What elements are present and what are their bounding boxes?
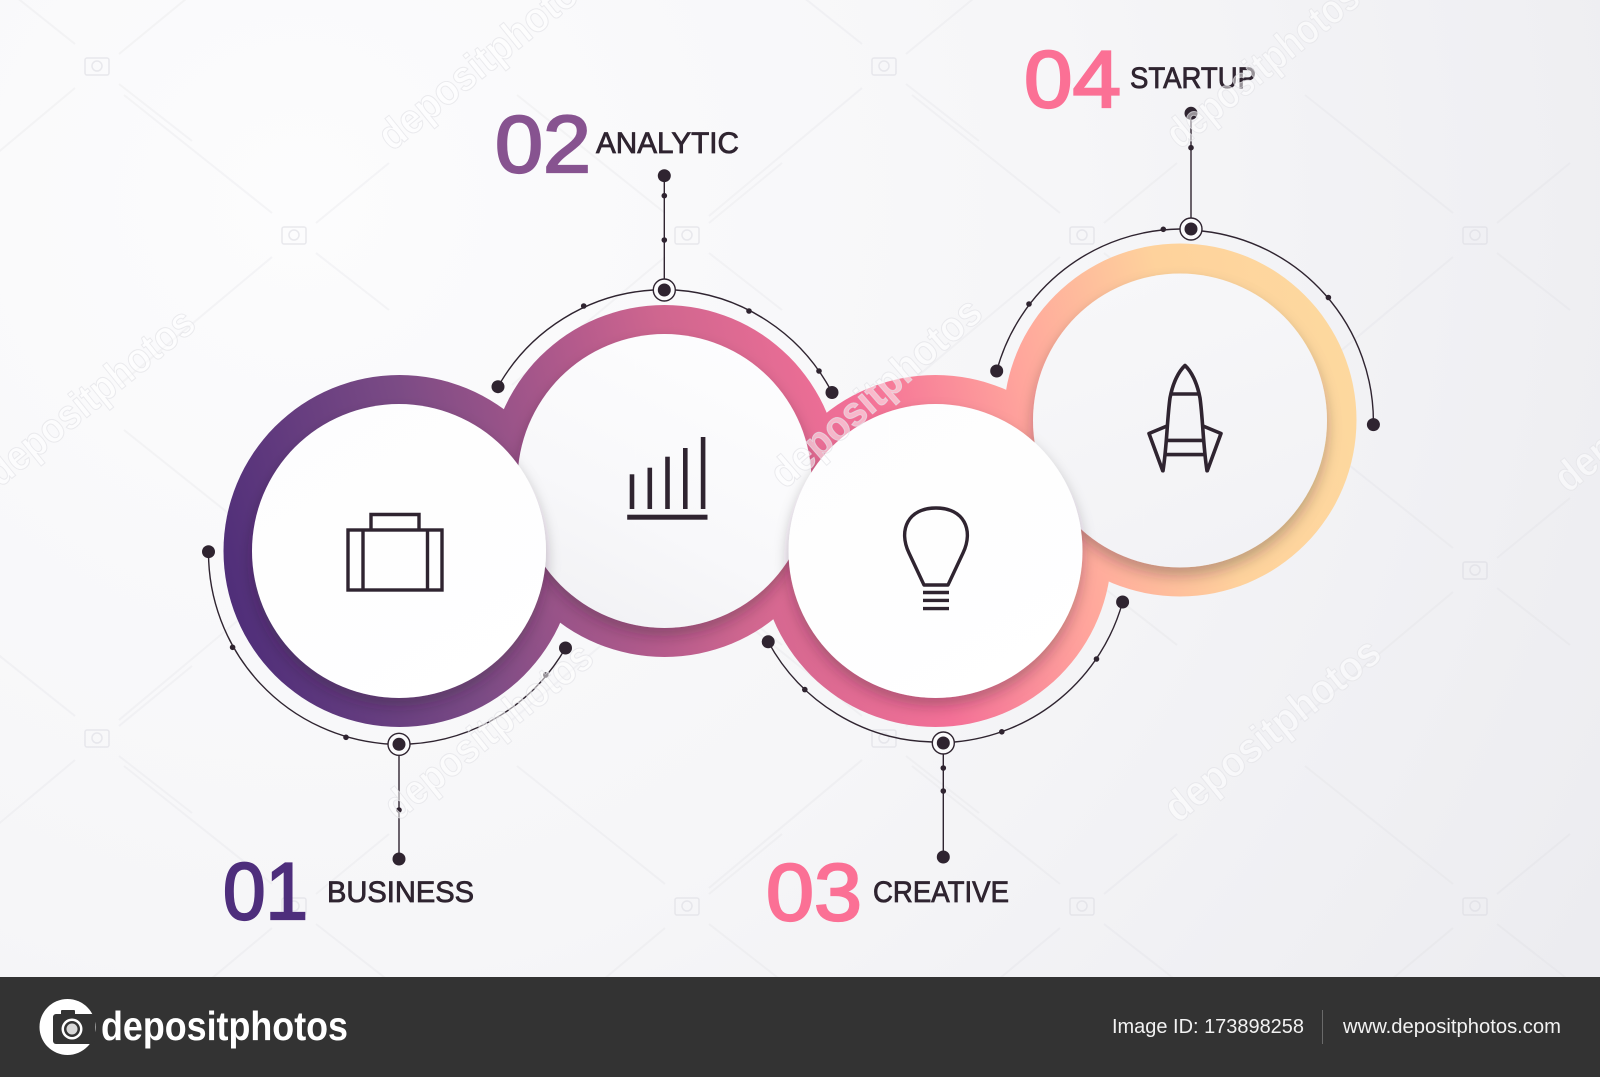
watermark text: depositphotos: [1154, 628, 1390, 831]
label: 01 business: BUSINESS: [327, 876, 474, 909]
connector: business: [202, 545, 572, 866]
connector: creative: [762, 596, 1129, 864]
disc: startup: [1033, 274, 1327, 568]
label: 02 analytic: 02: [495, 100, 591, 190]
watermark text: depositphotos: [374, 632, 602, 829]
icon: briefcase: [348, 514, 442, 590]
connector: analytic: [492, 169, 838, 399]
footer url: www.depositphotos.com: [1342, 1016, 1561, 1038]
disc: analytic: [518, 334, 812, 628]
label: 03 creative: 03: [766, 848, 862, 938]
label: 02 analytic: ANALYTIC: [596, 127, 739, 160]
watermark text: [0, 0, 1600, 831]
footer divider: [1322, 1010, 1323, 1044]
footer logo icon: [40, 999, 96, 1055]
icon: light bulb: [905, 508, 967, 609]
icon: rocket: [1149, 366, 1221, 471]
label: 04 startup: 04: [1024, 35, 1121, 125]
gradient band behind the four discs: [224, 244, 1356, 727]
disc: creative: [788, 404, 1082, 698]
label: 04 startup: [1024, 35, 1256, 125]
footer logo wordmark: depositphotos: [101, 1003, 348, 1049]
footer image id: Image ID: 173898258: [1112, 1016, 1304, 1038]
label: 02 analytic: [495, 100, 739, 190]
label: 01 business: 01: [223, 847, 308, 937]
footer bar: [0, 977, 1600, 1077]
label: 03 creative: CREATIVE: [873, 876, 1009, 909]
disc: business: [252, 404, 546, 698]
label: 04 startup: STARTUP: [1130, 62, 1256, 95]
label: 03 creative: [766, 848, 1009, 938]
connector: startup: [990, 107, 1380, 431]
label: 01 business: [223, 847, 474, 937]
icon: bar chart: [627, 437, 708, 520]
watermark text: depositphotos: [760, 287, 991, 497]
